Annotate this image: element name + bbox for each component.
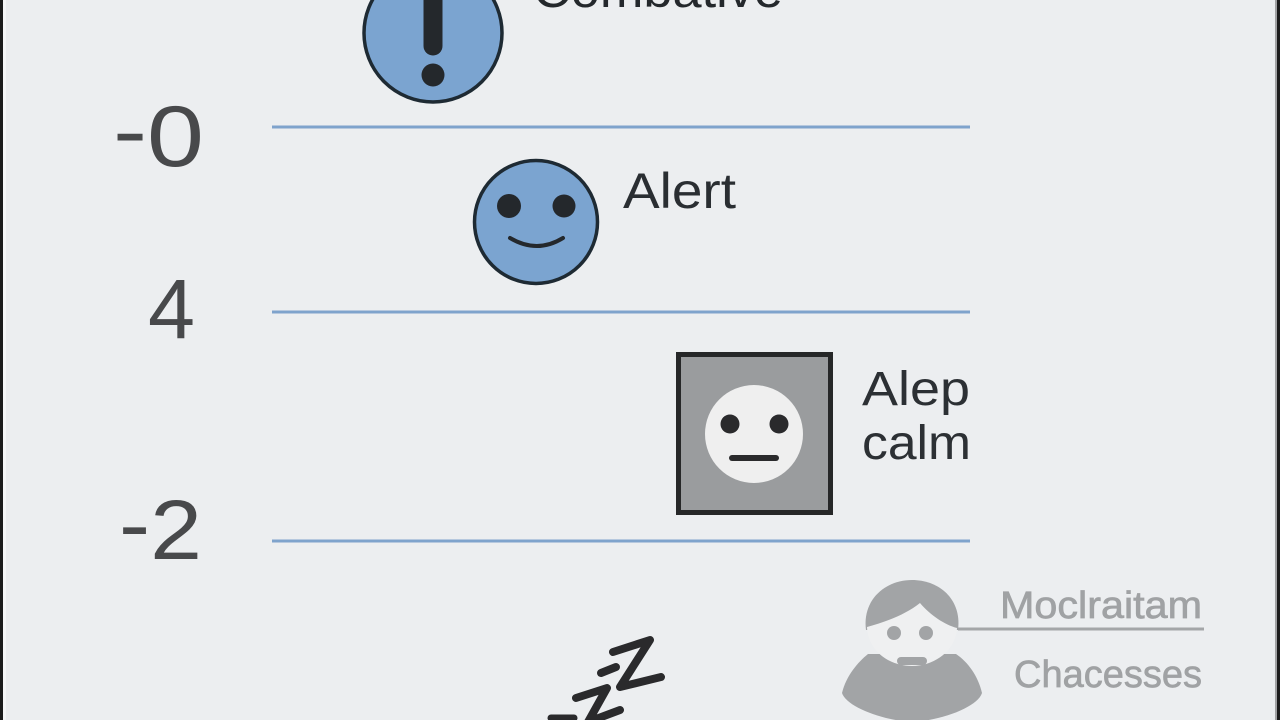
label: Alert: Alert	[623, 163, 736, 219]
scale number: -0: -	[113, 83, 147, 179]
icon: alert smiling face	[474, 160, 598, 284]
icon: gray person avatar	[842, 580, 982, 720]
scale number: -0: 0	[147, 89, 204, 185]
label: Alep calm	[862, 363, 971, 470]
label: Moclraitam: Moclraitam	[1000, 585, 1202, 627]
icon: sleeping zzz	[551, 640, 661, 720]
scale number: -2: -	[119, 477, 150, 571]
icon: combative exclamation face	[364, 0, 502, 102]
scale number: -2: 2	[150, 483, 202, 577]
scale number: 4: 4	[148, 262, 195, 356]
label: Alep calm: Alep	[862, 363, 970, 416]
label: Alep calm: calm	[862, 417, 971, 470]
icon: calm neutral face in square	[678, 354, 830, 512]
label: Chacesses: Chacesses	[1014, 654, 1202, 696]
